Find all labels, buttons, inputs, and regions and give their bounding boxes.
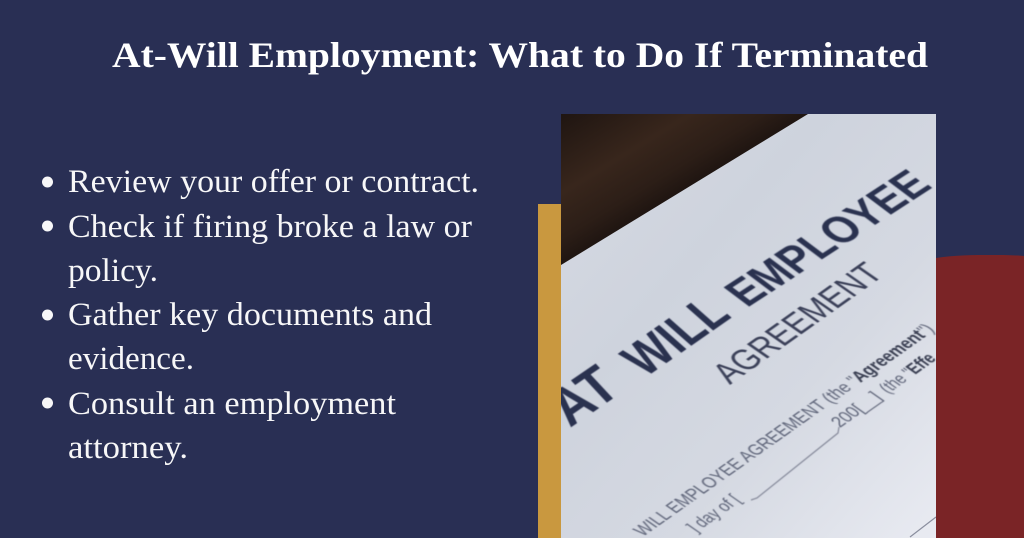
gold accent bar: [538, 204, 561, 538]
bullet 2: Check if firing broke a law or: [68, 209, 472, 245]
document signature rule: [910, 517, 936, 537]
bullet 1: Review your offer or contract.: [68, 164, 479, 200]
wooden table: [561, 114, 808, 265]
bullet 4: attorney.: [68, 430, 188, 466]
bullet 2: [42, 209, 472, 289]
bullet list: [42, 164, 479, 466]
document body line 2: [683, 350, 941, 536]
document heading: [561, 168, 933, 428]
bullet 3: Gather key documents and: [68, 297, 433, 333]
paper sheet: [561, 114, 936, 538]
bullet 4: Consult an employment: [68, 386, 396, 422]
document body line 2: 200[__]: [827, 389, 887, 431]
bullet 2: policy.: [68, 253, 158, 289]
document body line 2: ] day of [: [683, 491, 746, 536]
title: At-Will Employment: What to Do If Terminated: [112, 35, 928, 75]
document subheading: AGREEMENT: [703, 256, 891, 390]
document heading: AT: [535, 354, 632, 438]
photo: at-will employee agreement document: [535, 114, 941, 538]
bullet 3: [42, 297, 433, 377]
document body line 2: (the "Effe: [875, 350, 941, 397]
bullet 3: evidence.: [68, 341, 194, 377]
bullet 4: [42, 386, 396, 466]
red decorative shape: [936, 255, 1024, 538]
document heading: EMPLOYEE: [713, 162, 941, 314]
document heading: WILL: [610, 286, 742, 386]
document body line 1: WILL EMPLOYEE AGREEMENT (the "Agreement"): [630, 321, 939, 538]
